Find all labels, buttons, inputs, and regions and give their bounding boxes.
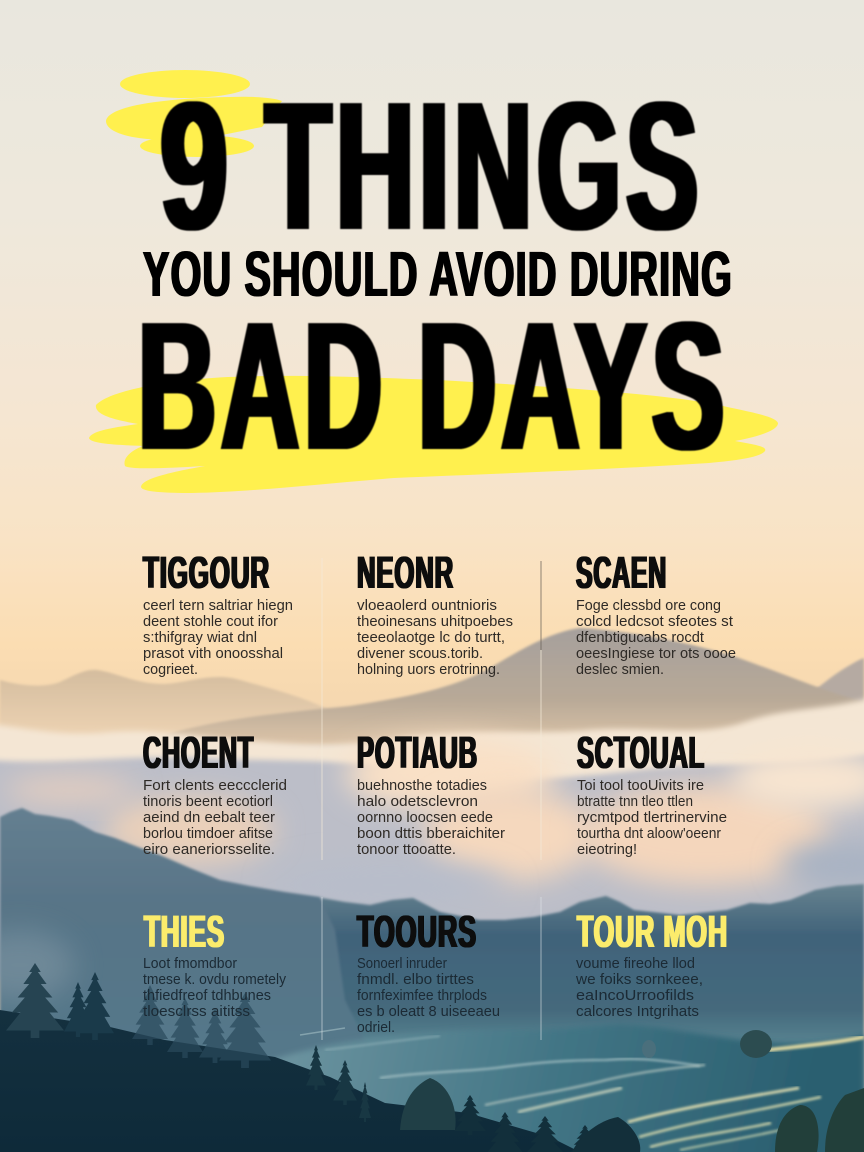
item 8: Toours: fornfeximfee thrplods — [357, 988, 487, 1004]
item 3: Scaen — [576, 547, 736, 678]
background: distant mountains — [0, 628, 864, 760]
item 6: Sctoual: eieotring! — [577, 842, 637, 858]
item 9: Tour Moh: TOUR MOH — [577, 906, 728, 957]
item 1: Tiggour: ceerl tern saltriar hiegn — [143, 598, 293, 614]
background: dark foreground forest — [0, 963, 864, 1152]
item 3: Scaen: deslec smien. — [576, 662, 664, 678]
item 2: Neonr: vloeaolerd ountnioris — [357, 598, 497, 614]
item 1: Tiggour: s:thifgray wiat dnl — [143, 630, 257, 646]
item 4: Choent: borlou timdoer afitse — [143, 826, 273, 842]
yellow brush accent behind 9 — [106, 70, 282, 157]
item 9: Tour Moh — [575, 906, 728, 1020]
item 2: Neonr: theoinesans uhitpoebes — [357, 614, 513, 630]
item 8: Toours: Sonoerl inruder — [357, 956, 447, 972]
item 5: Potiaub — [357, 727, 505, 858]
item 7: Thies: tloesclrss aititss — [143, 1004, 250, 1020]
item 7: Thies: tmese k. ovdu rometely — [143, 972, 287, 988]
title: BAD DAYS: BAD — [138, 283, 387, 488]
item 2: Neonr: holning uors erotrinng. — [357, 662, 500, 678]
background: valley fields — [230, 1024, 864, 1152]
item 9: Tour Moh: voume fireohe llod — [576, 956, 695, 972]
item 1: Tiggour: deent stohle cout ifor — [143, 614, 278, 630]
yellow brush accent behind Bad Days — [89, 376, 778, 493]
item 7: Thies: THIES — [144, 906, 225, 957]
item 4: Choent: tinoris beent ecotiorl — [143, 794, 273, 810]
item 8: Toours: odriel. — [357, 1020, 395, 1036]
item 3: Scaen: dfenbtigucabs rocdt — [576, 630, 704, 646]
item 8: Toours: es b oleatt 8 uiseeaeu — [357, 1004, 500, 1020]
item 4: Choent: aeind dn eebalt teer — [143, 810, 275, 826]
item 9: Tour Moh: calcores Intgrihats — [576, 1004, 699, 1020]
background: sea of clouds — [0, 692, 864, 978]
item 5: Potiaub: oornno loocsen eede — [357, 810, 493, 826]
item 3: Scaen: SCAEN — [576, 547, 667, 598]
column dividers — [322, 558, 541, 1040]
item 6: Sctoual: rycmtpod tlertrinervine — [577, 810, 727, 826]
item 1: Tiggour — [143, 547, 293, 678]
item 4: Choent: CHOENT — [143, 727, 254, 778]
item 1: Tiggour: TIGGOUR — [143, 547, 270, 598]
item 8: Toours: TOOURS — [357, 906, 477, 957]
item 6: Sctoual: tourtha dnt aloow'oeenr — [577, 826, 721, 842]
item 6: Sctoual: SCTOUAL — [577, 727, 705, 778]
item 6: Sctoual — [577, 727, 727, 858]
item 8: Toours — [357, 906, 500, 1036]
item 2: Neonr: NEONR — [357, 547, 454, 598]
title: 9 THINGS: 9 — [160, 63, 228, 268]
item 4: Choent: eiro eaneriorsselite. — [143, 842, 275, 858]
item 4: Choent — [143, 727, 287, 858]
item 6: Sctoual: btratte tnn tleo ttlen — [577, 794, 693, 810]
item 5: Potiaub: boon dttis bberaichiter — [357, 826, 505, 842]
background: forested hills — [0, 808, 864, 1152]
item 7: Thies — [143, 906, 287, 1020]
item 5: Potiaub: tonoor ttooatte. — [357, 842, 456, 858]
item 5: Potiaub: buehnosthe totadies — [357, 778, 487, 794]
item 3: Scaen: Foge clessbd ore cong — [576, 598, 721, 614]
item 1: Tiggour: cogrieet. — [143, 662, 198, 678]
item 6: Sctoual: Toi tool tooUivits ire — [577, 778, 704, 794]
item 2: Neonr: divener scous.torib. — [357, 646, 483, 662]
item 2: Neonr: teeeolaotge lc do turtt, — [357, 630, 505, 646]
item 1: Tiggour: prasot vith onoosshal — [143, 646, 283, 662]
item 3: Scaen: oeesIngiese tor ots oooe — [576, 646, 736, 662]
item 9: Tour Moh: eaIncoUrroofilds — [576, 988, 694, 1004]
item 2: Neonr — [357, 547, 513, 678]
item 4: Choent: Fort clents eeccclerid — [143, 778, 287, 794]
item 7: Thies: thfiedfreof tdhbunes — [143, 988, 271, 1004]
title: 9 THINGS — [160, 63, 703, 268]
item 5: Potiaub: POTIAUB — [357, 727, 478, 778]
item 5: Potiaub: halo odetsclevron — [357, 794, 478, 810]
item 9: Tour Moh: we foiks sornkeee, — [575, 972, 703, 988]
item 8: Toours: fnmdl. elbo tirttes — [357, 972, 474, 988]
item 7: Thies: Loot fmomdbor — [143, 956, 237, 972]
item 3: Scaen: colcd ledcsot sfeotes st — [576, 614, 733, 630]
